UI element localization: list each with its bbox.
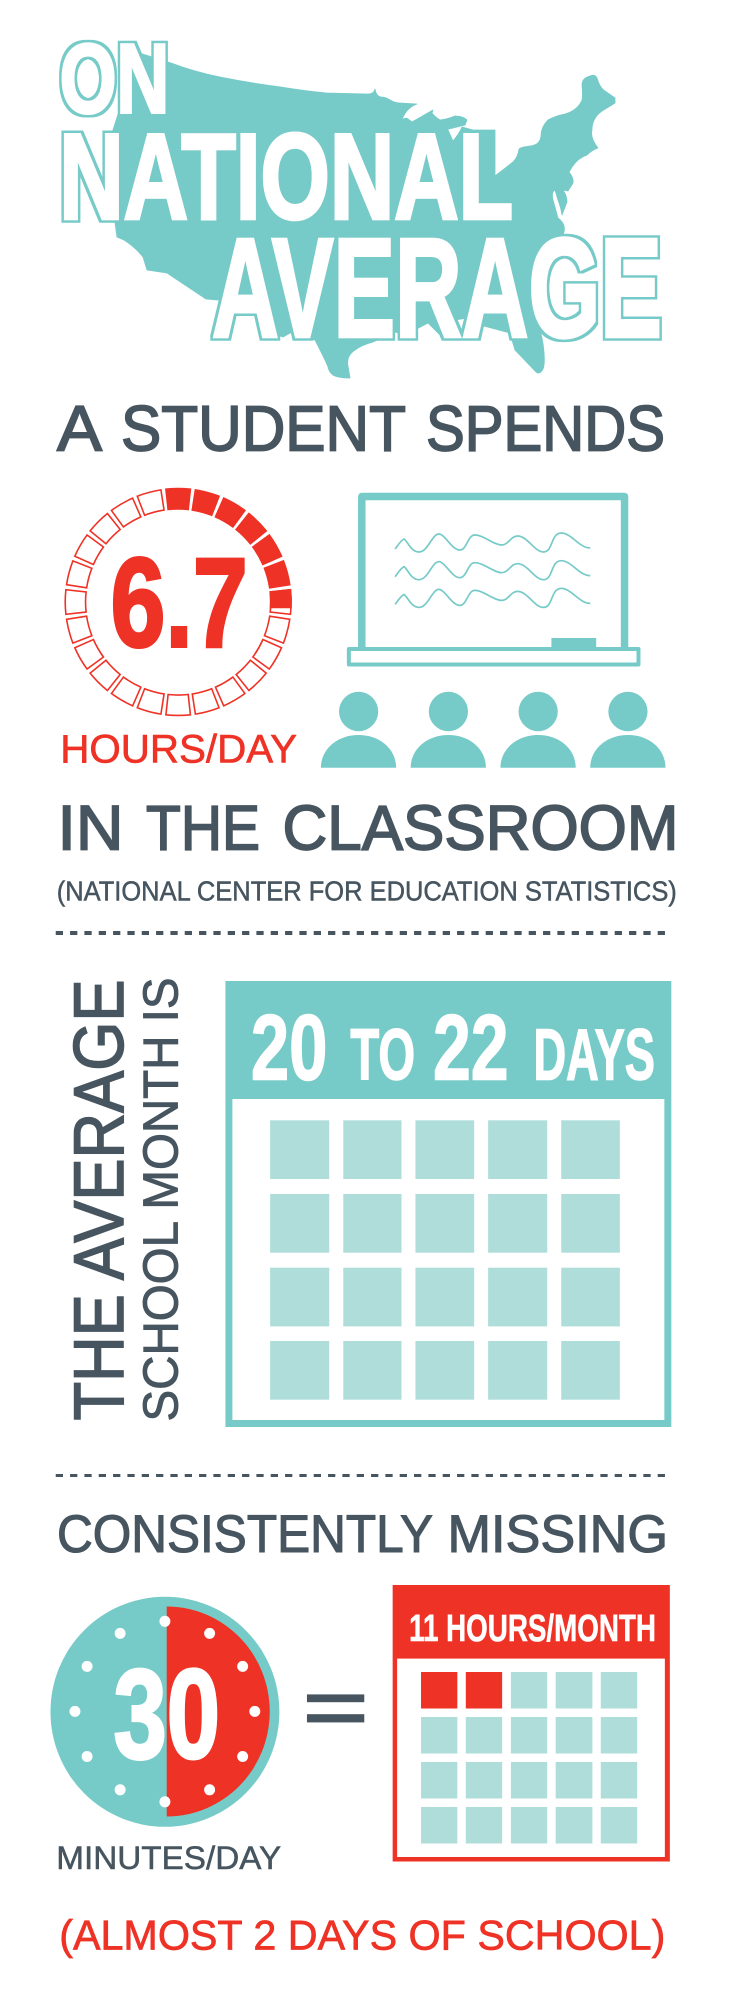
- source note: (NATIONAL CENTER FOR EDUCATION STATISTICS): [57, 875, 677, 907]
- icon: board tray: [349, 649, 638, 664]
- label: hours per day: HOURS/DAY: [60, 727, 297, 772]
- icon: eraser: [551, 638, 596, 648]
- calendar header text: DAYS: [533, 1015, 655, 1096]
- icon: map of the United States: [112, 50, 615, 378]
- heading: A student spends: [57, 392, 665, 464]
- number: 30: 30: [113, 1643, 220, 1785]
- chart: 6.7 hours per day ring: [65, 489, 291, 715]
- heading: in the classroom: THE: [146, 794, 260, 864]
- icon: equals sign: [307, 1694, 364, 1722]
- title line: ON: ON: [60, 24, 169, 134]
- title line: NATIONAL: NATIONAL: [59, 108, 513, 245]
- calendar header text: TO: [350, 1015, 415, 1096]
- remaining day cells: [421, 1672, 637, 1844]
- calendar day cells: [270, 1120, 620, 1400]
- heading: consistently missing: CONSISTENTLY: [57, 1505, 433, 1564]
- calendar header text: [251, 995, 655, 1100]
- missed day cells: [421, 1672, 502, 1708]
- rotated heading: school month is: SCHOOL MONTH IS: [135, 978, 189, 1422]
- heading: in the classroom: IN: [58, 794, 124, 864]
- label: minutes per day: MINUTES/DAY: [56, 1840, 281, 1876]
- heading: in the classroom: CLASSROOM: [282, 794, 678, 864]
- heading: A student spends: SPENDS: [426, 392, 665, 464]
- icon: whiteboard: [349, 496, 638, 664]
- heading: A student spends: STUDENT: [121, 392, 406, 464]
- squiggle writing lines: [395, 533, 590, 607]
- number: 6.7: 6.7: [110, 531, 248, 674]
- calendar header text: 22: [433, 995, 509, 1100]
- title block: [59, 24, 662, 367]
- rotated heading: the average: THE AVERAGE: [60, 980, 139, 1420]
- heading: A student spends: A: [57, 392, 102, 464]
- heading: consistently missing: [57, 1505, 668, 1564]
- panel: missed time calendar: [393, 1585, 670, 1862]
- heading: consistently missing: MISSING: [448, 1505, 668, 1564]
- heading: in the classroom: [58, 794, 678, 864]
- panel: school month calendar: [225, 981, 671, 1427]
- calendar header text: 20: [251, 995, 327, 1100]
- footer note: almost 2 days of school: (ALMOST 2 DAYS OF SCHOOL): [59, 1912, 665, 1959]
- icon: clock showing 30 minutes: [50, 1597, 279, 1827]
- clock hour dots: [69, 1616, 260, 1807]
- icon: four students: [321, 692, 665, 768]
